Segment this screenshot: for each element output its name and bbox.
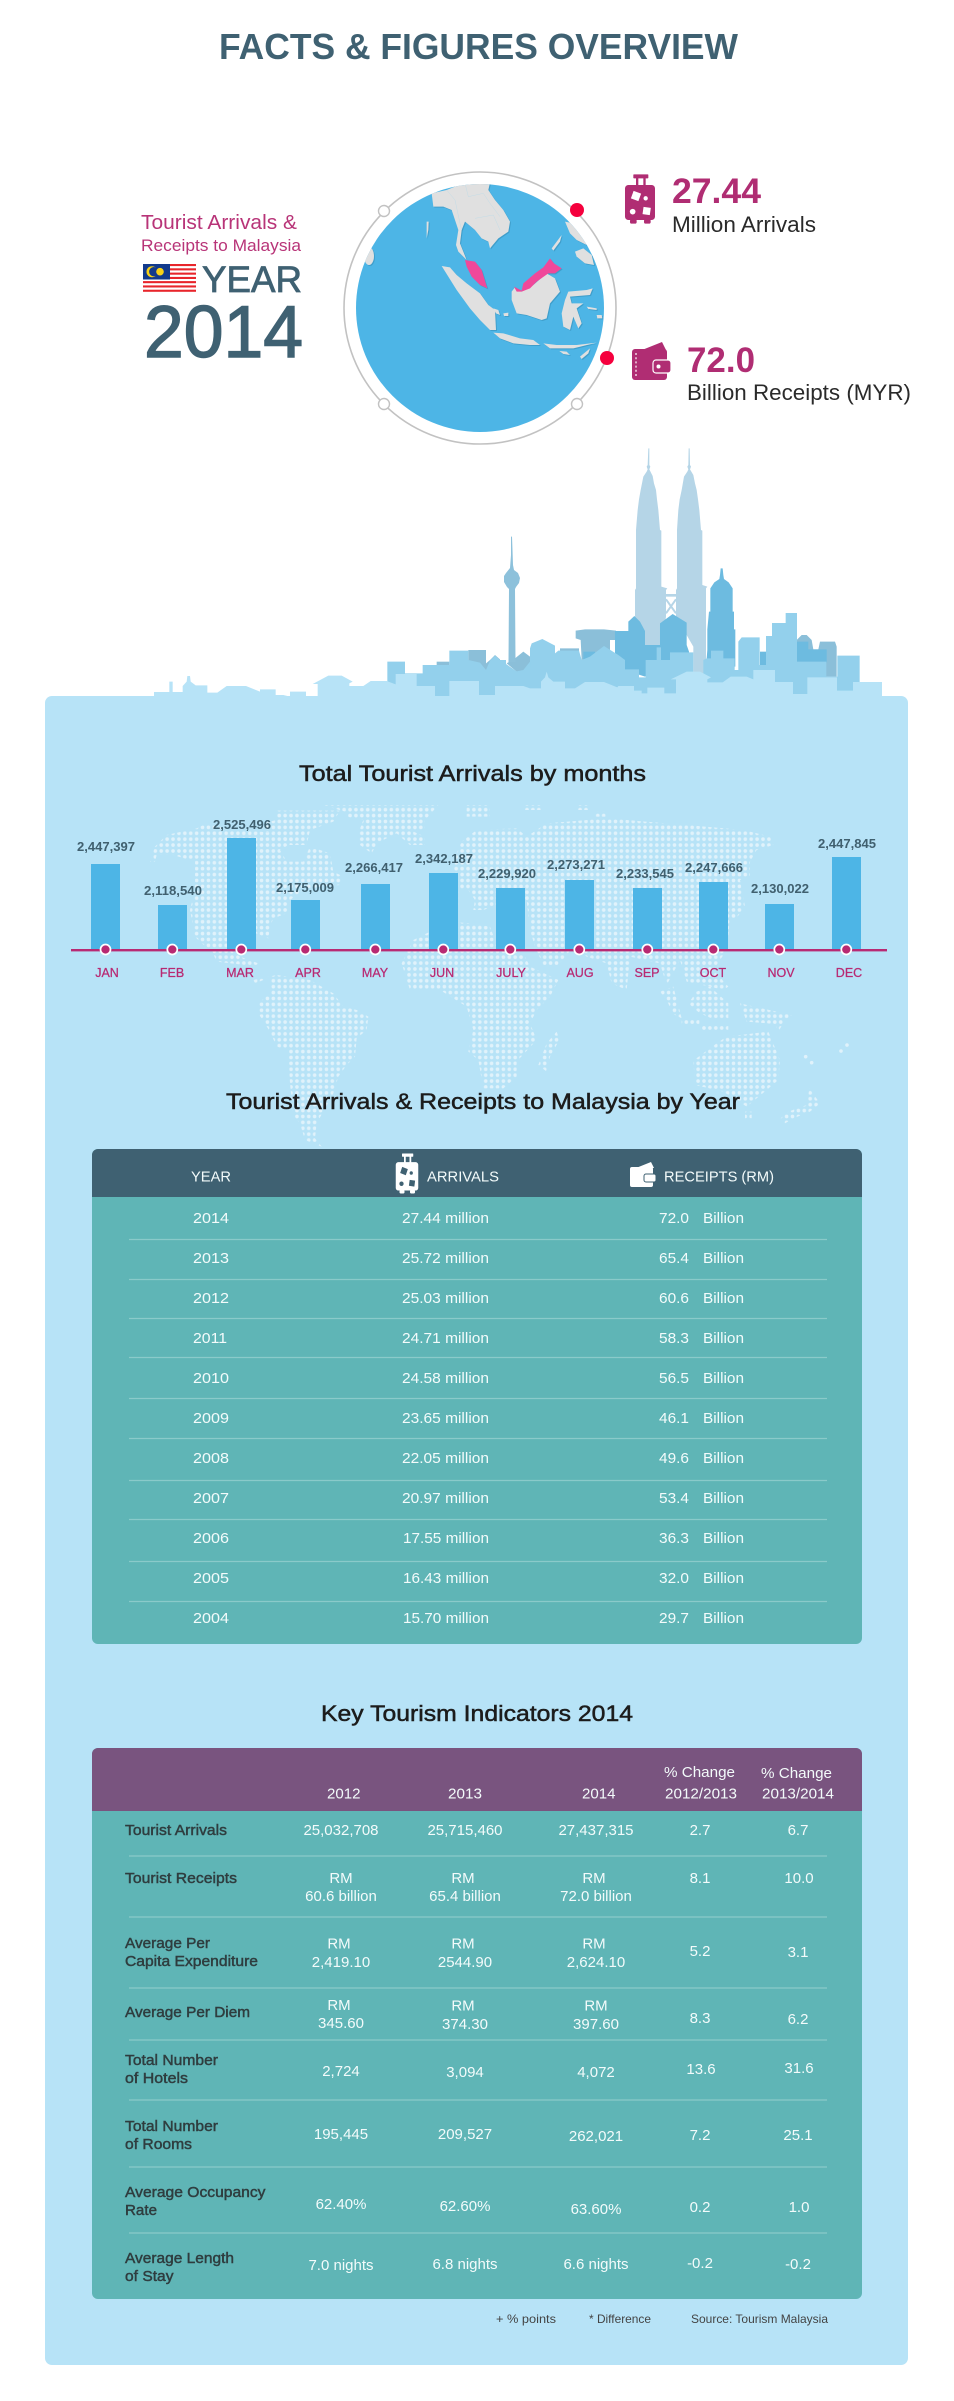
row: 2012: 2012 xyxy=(193,1290,229,1307)
row: average per diem: 374.30 xyxy=(442,2016,488,2033)
value: 27.44 xyxy=(672,172,762,211)
row: average per capita expenditure: 2544.90 xyxy=(438,1954,492,1971)
row: average occupancy rate: 62.40% xyxy=(316,2196,366,2213)
row: 2004: Billion xyxy=(703,1610,744,1627)
row: total number of rooms: 262,021 xyxy=(569,2128,623,2145)
bar values: 2,266,417 xyxy=(345,860,403,875)
row: total number of hotels: 31.6 xyxy=(784,2060,814,2077)
caption: Billion Receipts (MYR) xyxy=(687,380,911,405)
heading: yearly table: Tourist Arrivals & Receipts to Malaysia by Year xyxy=(226,1089,740,1114)
bar values: 2,342,187 xyxy=(415,851,473,866)
row: tourist arrivals: 6.7 xyxy=(788,1822,808,1839)
row: average occupancy rate: Rate xyxy=(125,2203,157,2219)
icon: luggage xyxy=(396,1154,418,1193)
month labels xyxy=(95,966,862,980)
row: average occupancy rate: 62.60% xyxy=(440,2198,490,2215)
stat: receipts xyxy=(632,341,911,405)
row: 2009: 2009 xyxy=(193,1410,229,1427)
table header: 2012 xyxy=(327,1786,360,1802)
row: 2008: 22.05 million xyxy=(402,1450,489,1467)
bar values: 2,233,545 xyxy=(616,866,674,881)
row: 2007: 53.4 xyxy=(659,1490,689,1507)
row: 2005: 16.43 million xyxy=(403,1570,489,1587)
row: 2008: Billion xyxy=(703,1450,744,1467)
month labels: OCT xyxy=(700,966,727,980)
row: average per diem: 345.60 xyxy=(318,2015,364,2032)
bar chart: monthly arrivals xyxy=(71,817,887,980)
row: total number of rooms: 195,445 xyxy=(314,2126,368,2143)
dotted world map xyxy=(150,805,849,1147)
row: average occupancy rate: Average Occupancy xyxy=(125,2185,266,2201)
row: 2014: 2014 xyxy=(193,1210,229,1227)
row: 2014: 72.0 xyxy=(659,1210,689,1227)
table header xyxy=(92,1748,862,1811)
month labels: JULY xyxy=(496,966,526,980)
row: 2013: 2013 xyxy=(193,1250,229,1267)
row: tourist receipts: RM xyxy=(451,1870,475,1887)
bar values: 2,118,540 xyxy=(144,883,202,898)
row: average per capita expenditure: RM xyxy=(327,1936,351,1952)
row: total number of rooms: 25.1 xyxy=(783,2127,813,2144)
row: tourist receipts: RM xyxy=(582,1870,606,1887)
row: tourist receipts: 60.6 billion xyxy=(305,1888,377,1905)
bar values: 2,273,271 xyxy=(547,857,605,872)
row: 2005: 2005 xyxy=(193,1570,229,1587)
row: total number of hotels: of Hotels xyxy=(125,2071,188,2087)
skyline of Kuala Lumpur xyxy=(130,448,897,710)
row: 2005: Billion xyxy=(703,1570,744,1587)
row: tourist receipts: 10.0 xyxy=(784,1870,814,1887)
main panel background xyxy=(45,696,908,2365)
row: 2006 xyxy=(193,1530,744,1547)
row: total number of rooms: 209,527 xyxy=(438,2126,492,2143)
row: 2012: 25.03 million xyxy=(402,1290,489,1307)
row: 2013: 65.4 xyxy=(659,1250,689,1267)
year block xyxy=(141,212,303,373)
row: tourist receipts: 8.1 xyxy=(690,1870,710,1887)
table header: 2013/2014 xyxy=(762,1786,834,1802)
row: tourist arrivals: 25,032,708 xyxy=(303,1822,379,1839)
footnotes xyxy=(496,2312,828,2326)
row: average occupancy rate: 1.0 xyxy=(789,2199,809,2216)
bar values: 2,525,496 xyxy=(213,817,271,832)
axis markers xyxy=(100,944,851,954)
row: average per diem: 6.2 xyxy=(788,2011,808,2028)
foreground skyline in panel colour xyxy=(130,670,897,710)
row: average per diem: 397.60 xyxy=(573,2016,619,2033)
table: key tourism indicators xyxy=(92,1748,862,2299)
Petronas twin towers xyxy=(635,448,707,673)
row: average length of stay: 6.6 nights xyxy=(563,2256,629,2273)
table header: 2012/2013 xyxy=(665,1786,737,1802)
row: 2011: Billion xyxy=(703,1330,744,1347)
row: 2013: 25.72 million xyxy=(402,1250,489,1267)
row: total number of hotels: 13.6 xyxy=(686,2061,716,2078)
row: 2010: 24.58 million xyxy=(402,1370,489,1387)
table header xyxy=(92,1149,862,1197)
footnotes: * Difference xyxy=(589,2312,651,2326)
row: tourist receipts: RM xyxy=(329,1870,353,1887)
row: average length of stay: 6.8 nights xyxy=(432,2256,498,2273)
icon: luggage xyxy=(625,174,655,224)
value: 72.0 xyxy=(687,341,755,380)
month labels: FEB xyxy=(160,966,184,980)
row: 2009: 46.1 xyxy=(659,1410,689,1427)
heading: key indicators: Key Tourism Indicators 2014 xyxy=(321,1701,633,1726)
row: average per capita expenditure: 5.2 xyxy=(690,1943,710,1960)
row: 2006: 2006 xyxy=(193,1530,229,1547)
row: average per capita expenditure: Average Per xyxy=(125,1936,210,1952)
stat: arrivals xyxy=(625,172,816,237)
row: 2010: 2010 xyxy=(193,1370,229,1387)
row: 2013: Billion xyxy=(703,1250,744,1267)
row: 2009 xyxy=(193,1410,744,1427)
month labels: JUN xyxy=(430,966,454,980)
row: tourist receipts: 65.4 billion xyxy=(429,1888,501,1905)
row: 2007: 20.97 million xyxy=(402,1490,489,1507)
row: average length of stay: 7.0 nights xyxy=(308,2257,374,2274)
row: 2007: 2007 xyxy=(193,1490,229,1507)
row: tourist arrivals: 25,715,460 xyxy=(427,1822,503,1839)
row: total number of hotels xyxy=(125,2053,814,2087)
row: 2012: 60.6 xyxy=(659,1290,689,1307)
row: total number of hotels: 2,724 xyxy=(322,2063,360,2080)
bar values: 2,175,009 xyxy=(276,880,334,895)
title: FACTS & FIGURES OVERVIEW xyxy=(219,26,738,67)
table header: % Change xyxy=(664,1764,735,1781)
icon: Malaysian flag xyxy=(143,264,196,294)
month labels: MAR xyxy=(226,966,254,980)
bars xyxy=(91,838,861,950)
footnotes: Source: Tourism Malaysia xyxy=(691,2312,828,2326)
row: 2006: Billion xyxy=(703,1530,744,1547)
row: total number of hotels: 3,094 xyxy=(446,2064,484,2081)
row: average per capita expenditure xyxy=(125,1936,808,1971)
row: average per capita expenditure: RM xyxy=(582,1936,606,1952)
row: total number of rooms: Total Number xyxy=(125,2119,218,2135)
row: 2014: Billion xyxy=(703,1210,744,1227)
footnotes: + % points xyxy=(496,2312,556,2326)
row: tourist arrivals xyxy=(125,1822,808,1839)
row: average occupancy rate: 63.60% xyxy=(571,2201,621,2218)
row: average length of stay: Average Length xyxy=(125,2251,234,2267)
caption: Million Arrivals xyxy=(672,212,816,237)
row: 2007 xyxy=(193,1490,744,1507)
row: 2011: 2011 xyxy=(193,1330,227,1347)
row: 2014 xyxy=(193,1210,744,1227)
row: total number of rooms: of Rooms xyxy=(125,2137,192,2153)
row: total number of hotels: Total Number xyxy=(125,2053,218,2069)
row: 2005 xyxy=(193,1570,744,1587)
row: average per capita expenditure: RM xyxy=(451,1936,475,1952)
row: 2005: 32.0 xyxy=(659,1570,689,1587)
row: average per diem: Average Per Diem xyxy=(125,2005,250,2021)
table header: 2013 xyxy=(448,1786,482,1802)
row: 2012: Billion xyxy=(703,1290,744,1307)
row: average per capita expenditure: Capita Expenditure xyxy=(125,1954,258,1970)
subtitle xyxy=(141,212,302,255)
row: average per diem: RM xyxy=(584,1998,608,2014)
heading: monthly arrivals: Total Tourist Arrivals by months xyxy=(299,761,646,786)
table header: 2014 xyxy=(582,1786,616,1802)
row: 2010 xyxy=(193,1370,744,1387)
muted background buildings xyxy=(437,629,837,677)
row: average per capita expenditure: 2,419.10 xyxy=(312,1954,370,1971)
ring markers xyxy=(378,203,614,410)
light-blue buildings xyxy=(387,613,882,710)
label: 2014: 2014 xyxy=(144,292,303,373)
KL Tower xyxy=(504,537,520,662)
row: 2007: Billion xyxy=(703,1490,744,1507)
table header: RECEIPTS (RM) xyxy=(664,1168,774,1186)
row: average per capita expenditure: 3.1 xyxy=(788,1944,808,1961)
row: tourist arrivals: 2.7 xyxy=(690,1822,710,1839)
map: Southeast Asia xyxy=(364,183,602,359)
month labels: NOV xyxy=(767,966,795,980)
row: average occupancy rate: 0.2 xyxy=(690,2199,710,2216)
icon: wallet xyxy=(632,342,671,380)
row: 2004: 15.70 million xyxy=(403,1610,489,1627)
month labels: AUG xyxy=(566,966,594,980)
row: 2009: 23.65 million xyxy=(402,1410,489,1427)
row: average per diem: RM xyxy=(327,1997,351,2014)
row: average length of stay: of Stay xyxy=(125,2269,174,2285)
row: 2014: 27.44 million xyxy=(402,1210,489,1227)
row: 2011: 24.71 million xyxy=(402,1330,489,1347)
row: 2004: 2004 xyxy=(193,1610,229,1627)
month labels: DEC xyxy=(836,966,862,980)
row: 2006: 36.3 xyxy=(659,1530,689,1547)
row: 2011 xyxy=(193,1330,744,1347)
row: total number of rooms xyxy=(125,2119,813,2153)
row: 2012 xyxy=(193,1290,744,1307)
row: total number of hotels: 4,072 xyxy=(577,2064,615,2081)
row: 2004 xyxy=(193,1610,744,1627)
bar values: 2,229,920 xyxy=(478,866,536,881)
row: 2011: 58.3 xyxy=(659,1330,689,1347)
icon: wallet xyxy=(630,1162,656,1187)
mid-blue buildings xyxy=(583,568,827,677)
month labels: APR xyxy=(295,966,321,980)
month labels: MAY xyxy=(362,966,389,980)
row: 2008: 49.6 xyxy=(659,1450,689,1467)
table: arrivals and receipts by year xyxy=(92,1149,862,1644)
row: average per diem: 8.3 xyxy=(690,2010,710,2027)
row: 2013 xyxy=(193,1250,744,1267)
row: 2008 xyxy=(193,1450,744,1467)
bar values: 2,130,022 xyxy=(751,881,809,896)
subtitle: Receipts to Malaysia xyxy=(141,236,302,255)
row: tourist arrivals: Tourist Arrivals xyxy=(125,1823,227,1839)
table header: YEAR xyxy=(191,1168,231,1186)
axis line xyxy=(71,949,887,951)
row: 2009: Billion xyxy=(703,1410,744,1427)
subtitle: Tourist Arrivals & xyxy=(141,212,298,234)
row dividers xyxy=(129,1856,827,2233)
row: average occupancy rate xyxy=(125,2185,809,2219)
row: average length of stay: -0.2 xyxy=(687,2255,713,2272)
globe with map of Southeast Asia xyxy=(344,172,616,444)
table header: ARRIVALS xyxy=(427,1168,499,1186)
bar values: 2,447,845 xyxy=(818,836,876,851)
row: average per diem xyxy=(125,1997,808,2033)
row: 2010: Billion xyxy=(703,1370,744,1387)
row: average per capita expenditure: 2,624.10 xyxy=(567,1954,625,1971)
row: tourist arrivals: 27,437,315 xyxy=(558,1822,634,1839)
month labels: SEP xyxy=(634,966,660,980)
row: 2006: 17.55 million xyxy=(403,1530,489,1547)
month labels: JAN xyxy=(95,966,119,980)
row: 2004: 29.7 xyxy=(659,1610,689,1627)
row: tourist receipts: Tourist Receipts xyxy=(125,1871,237,1887)
bar values: 2,447,397 xyxy=(77,839,135,854)
row: average per diem: RM xyxy=(451,1998,475,2014)
bar values: 2,247,666 xyxy=(685,860,743,875)
row dividers xyxy=(129,1240,827,1602)
table header: % Change xyxy=(761,1765,832,1782)
row: 2010: 56.5 xyxy=(659,1370,689,1387)
row: tourist receipts: 72.0 billion xyxy=(560,1888,632,1905)
bar values xyxy=(77,817,876,898)
row: total number of rooms: 7.2 xyxy=(690,2127,710,2144)
row: tourist receipts xyxy=(125,1870,814,1905)
label: YEAR: YEAR xyxy=(202,259,302,300)
row: average length of stay xyxy=(125,2251,811,2285)
row: average length of stay: -0.2 xyxy=(785,2256,811,2273)
row: 2008: 2008 xyxy=(193,1450,229,1467)
